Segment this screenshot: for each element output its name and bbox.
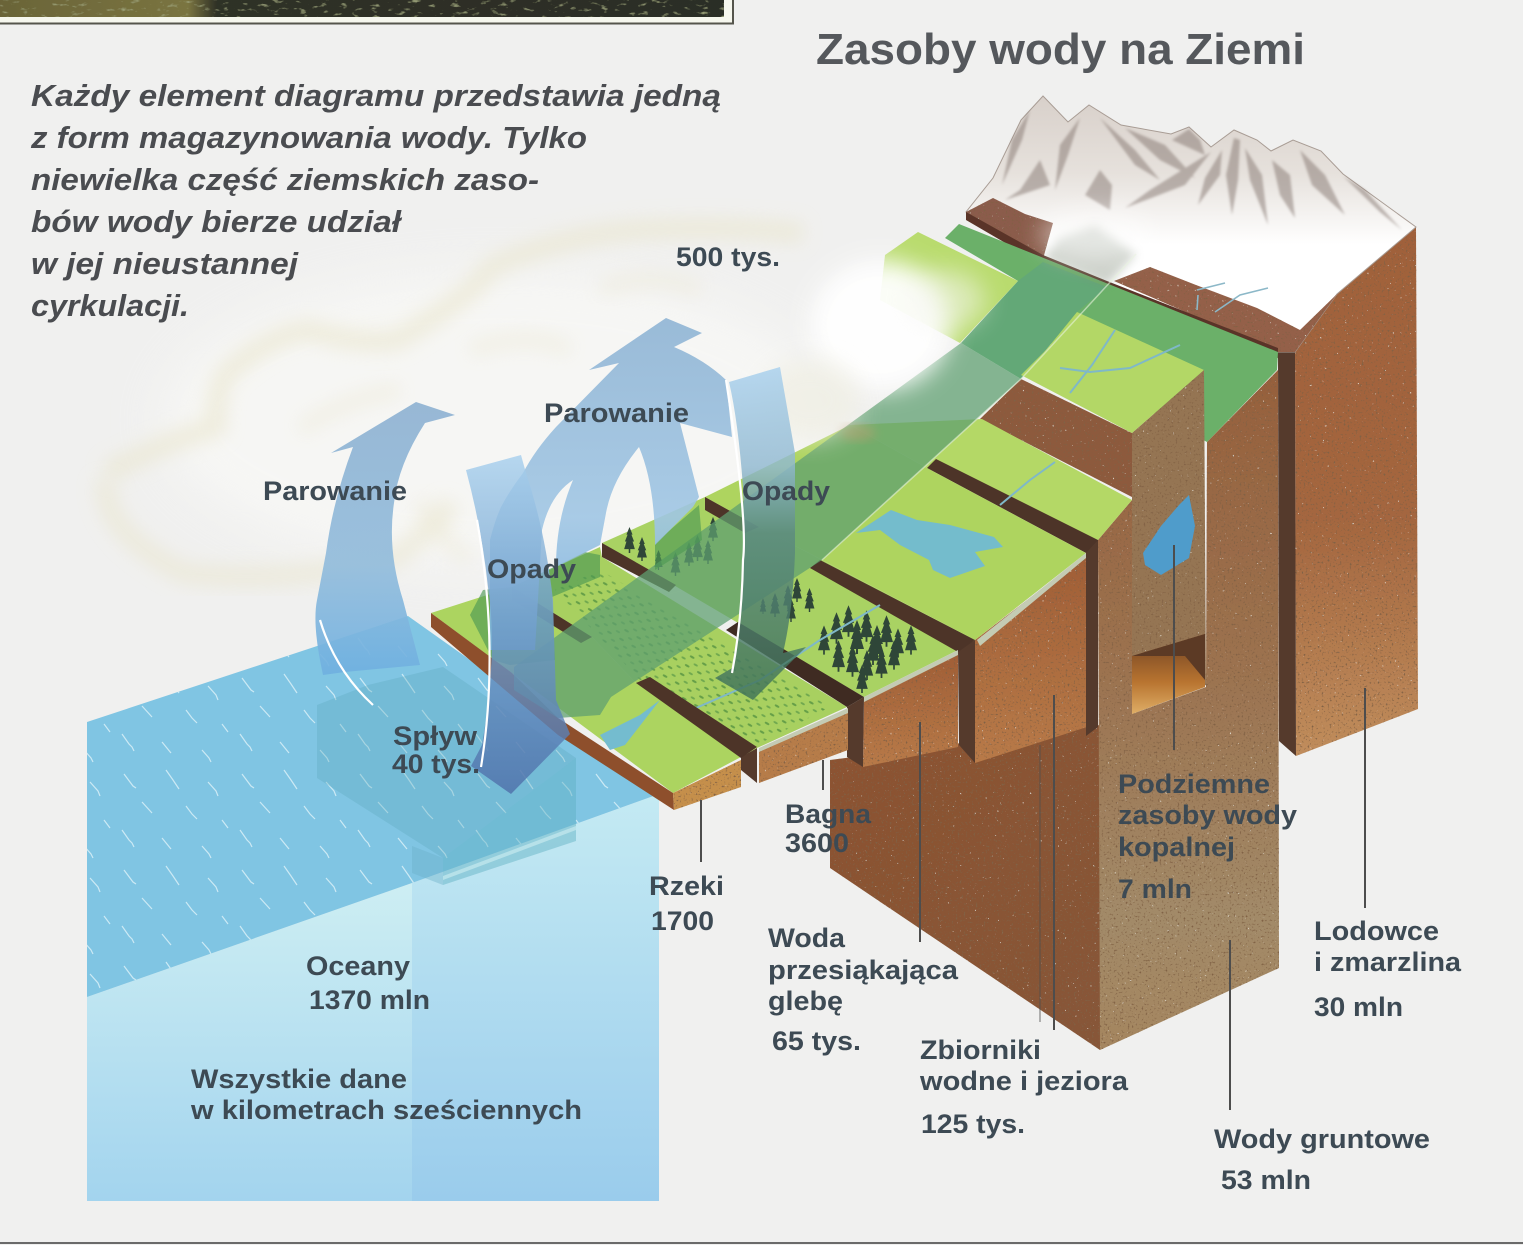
label: rivers: Rzeki — [649, 871, 724, 901]
leader lines — [701, 545, 1365, 1110]
gap — [705, 497, 759, 533]
intro text block: cyrkulacji. — [31, 288, 189, 323]
panel: marsh strip — [512, 543, 880, 783]
white arrow edge lines — [320, 380, 744, 767]
label: atmosphere: 500 tys. — [676, 242, 780, 272]
label: fossil groundwater: Podziemne — [1118, 769, 1270, 799]
label: reservoirs and lakes — [919, 1035, 1129, 1139]
label: soil water: przesiąkająca — [768, 955, 959, 985]
label: soil water: glebę — [768, 986, 843, 1016]
arrow: precipitation over land — [715, 367, 806, 700]
arrow: evaporation from ocean — [315, 402, 455, 675]
label: soil water: 65 tys. — [772, 1026, 861, 1056]
snow streaks — [1002, 110, 1402, 230]
dark vertical cut — [958, 640, 975, 763]
label: marshes: Bagna — [785, 799, 872, 829]
ocean front left face — [87, 883, 412, 1201]
note: units — [190, 1064, 582, 1125]
label: soil water: Woda — [768, 923, 846, 953]
label: evaporation ocean: Parowanie — [263, 476, 407, 506]
river — [1000, 462, 1055, 505]
panel: ocean — [87, 616, 659, 1201]
panel: groundwater column — [1098, 370, 1279, 1050]
white cloud over valley — [760, 211, 1150, 441]
strip side — [431, 613, 674, 810]
title: Zasoby wody na Ziemi — [816, 25, 1305, 74]
label: glaciers and permafrost: 30 mln — [1314, 992, 1403, 1022]
mountain streams — [1197, 283, 1268, 312]
panel: lake strip — [705, 419, 1132, 763]
intro text block: z form magazynowania wody. Tylko — [30, 120, 587, 155]
underground lake — [1143, 495, 1195, 575]
arrow: evaporation from land — [490, 318, 732, 650]
label: glaciers and permafrost — [1314, 916, 1462, 1022]
panel: rivers strip — [431, 587, 757, 810]
label: fossil groundwater: 7 mln — [1118, 874, 1192, 904]
intro text block: bów wody bierze udział — [31, 204, 402, 239]
dark gap — [927, 459, 1098, 553]
trees: small group — [760, 578, 814, 622]
arrow feet shadows on land — [470, 505, 702, 665]
label: glaciers and permafrost: i zmarzlina — [1314, 947, 1462, 977]
panel: glacier block right face — [1295, 227, 1418, 756]
label: fossil groundwater: zasoby wody — [1118, 800, 1297, 830]
label: reservoirs and lakes: wodne i jeziora — [919, 1066, 1129, 1096]
label: soil water — [768, 923, 959, 1056]
photo strip at top left — [0, 0, 733, 24]
intro text block: w jej nieustannej — [31, 246, 299, 281]
label: precipitation land: Opady — [742, 476, 830, 506]
label: oceans — [306, 951, 430, 1015]
label: runoff: 40 tys. — [392, 749, 480, 779]
strip face — [975, 555, 1087, 763]
band section behind fossil block — [961, 262, 1107, 379]
label: glaciers and permafrost: Lodowce — [1314, 916, 1439, 946]
label: marshes: 3600 — [785, 828, 849, 858]
arrow: precipitation over ocean — [466, 455, 570, 794]
trees: upper group — [624, 517, 718, 576]
label: fossil groundwater: kopalnej — [1118, 832, 1235, 862]
note: units: Wszystkie dane — [191, 1064, 407, 1094]
glacier block dark side — [1278, 352, 1296, 756]
panel: fossil groundwater block — [980, 312, 1206, 714]
ocean front right face — [412, 794, 659, 1201]
label: fossil groundwater — [1118, 769, 1297, 904]
intro text block: niewielka część ziemskich zaso- — [31, 162, 539, 197]
label: groundwater: 53 mln — [1221, 1165, 1311, 1195]
grey band section over the mountain — [1043, 226, 1136, 285]
band lower white edge — [822, 254, 1136, 560]
block right face — [1132, 370, 1206, 714]
strip top back — [850, 419, 1132, 540]
label: groundwater: Wody gruntowe — [1214, 1124, 1430, 1154]
light green back terrace — [880, 232, 1018, 343]
panel: mountains — [966, 96, 1416, 358]
label: oceans: 1370 mln — [309, 985, 430, 1015]
ocean surface — [87, 616, 659, 997]
back valley surface — [945, 224, 1278, 442]
label: runoff — [392, 721, 480, 779]
clouds — [106, 228, 840, 577]
translucent green band — [514, 343, 1021, 718]
intro text block: Każdy element diagramu przedstawia jedną — [31, 78, 721, 113]
label: precipitation ocean: Opady — [487, 554, 576, 584]
note: units: w kilometrach sześciennych — [190, 1095, 582, 1125]
label: rivers — [649, 871, 724, 936]
trees: forest — [818, 605, 917, 693]
rocky foot of mountain — [966, 198, 1053, 259]
label: groundwater — [1214, 1124, 1430, 1195]
intro text block — [30, 78, 721, 323]
bottom page border — [0, 1242, 1523, 1244]
block left face — [980, 379, 1132, 497]
label: oceans: Oceany — [306, 951, 410, 981]
strip top — [705, 425, 1086, 640]
block rivers — [1060, 330, 1180, 393]
label: reservoirs and lakes: 125 tys. — [921, 1109, 1025, 1139]
label: marshes — [785, 799, 872, 858]
label: runoff: Spływ — [393, 721, 478, 751]
panel: soil strip (forest) — [602, 497, 975, 767]
label: reservoirs and lakes: Zbiorniki — [920, 1035, 1041, 1065]
lake — [856, 510, 1003, 578]
panel: dark rock base under strata — [830, 725, 1100, 1050]
translucent sea volume block — [317, 667, 576, 885]
cavity — [1132, 634, 1205, 714]
river delta — [600, 700, 660, 750]
label: evaporation land: Parowanie — [544, 398, 689, 428]
label: rivers: 1700 — [651, 906, 714, 936]
block top — [1021, 312, 1204, 433]
